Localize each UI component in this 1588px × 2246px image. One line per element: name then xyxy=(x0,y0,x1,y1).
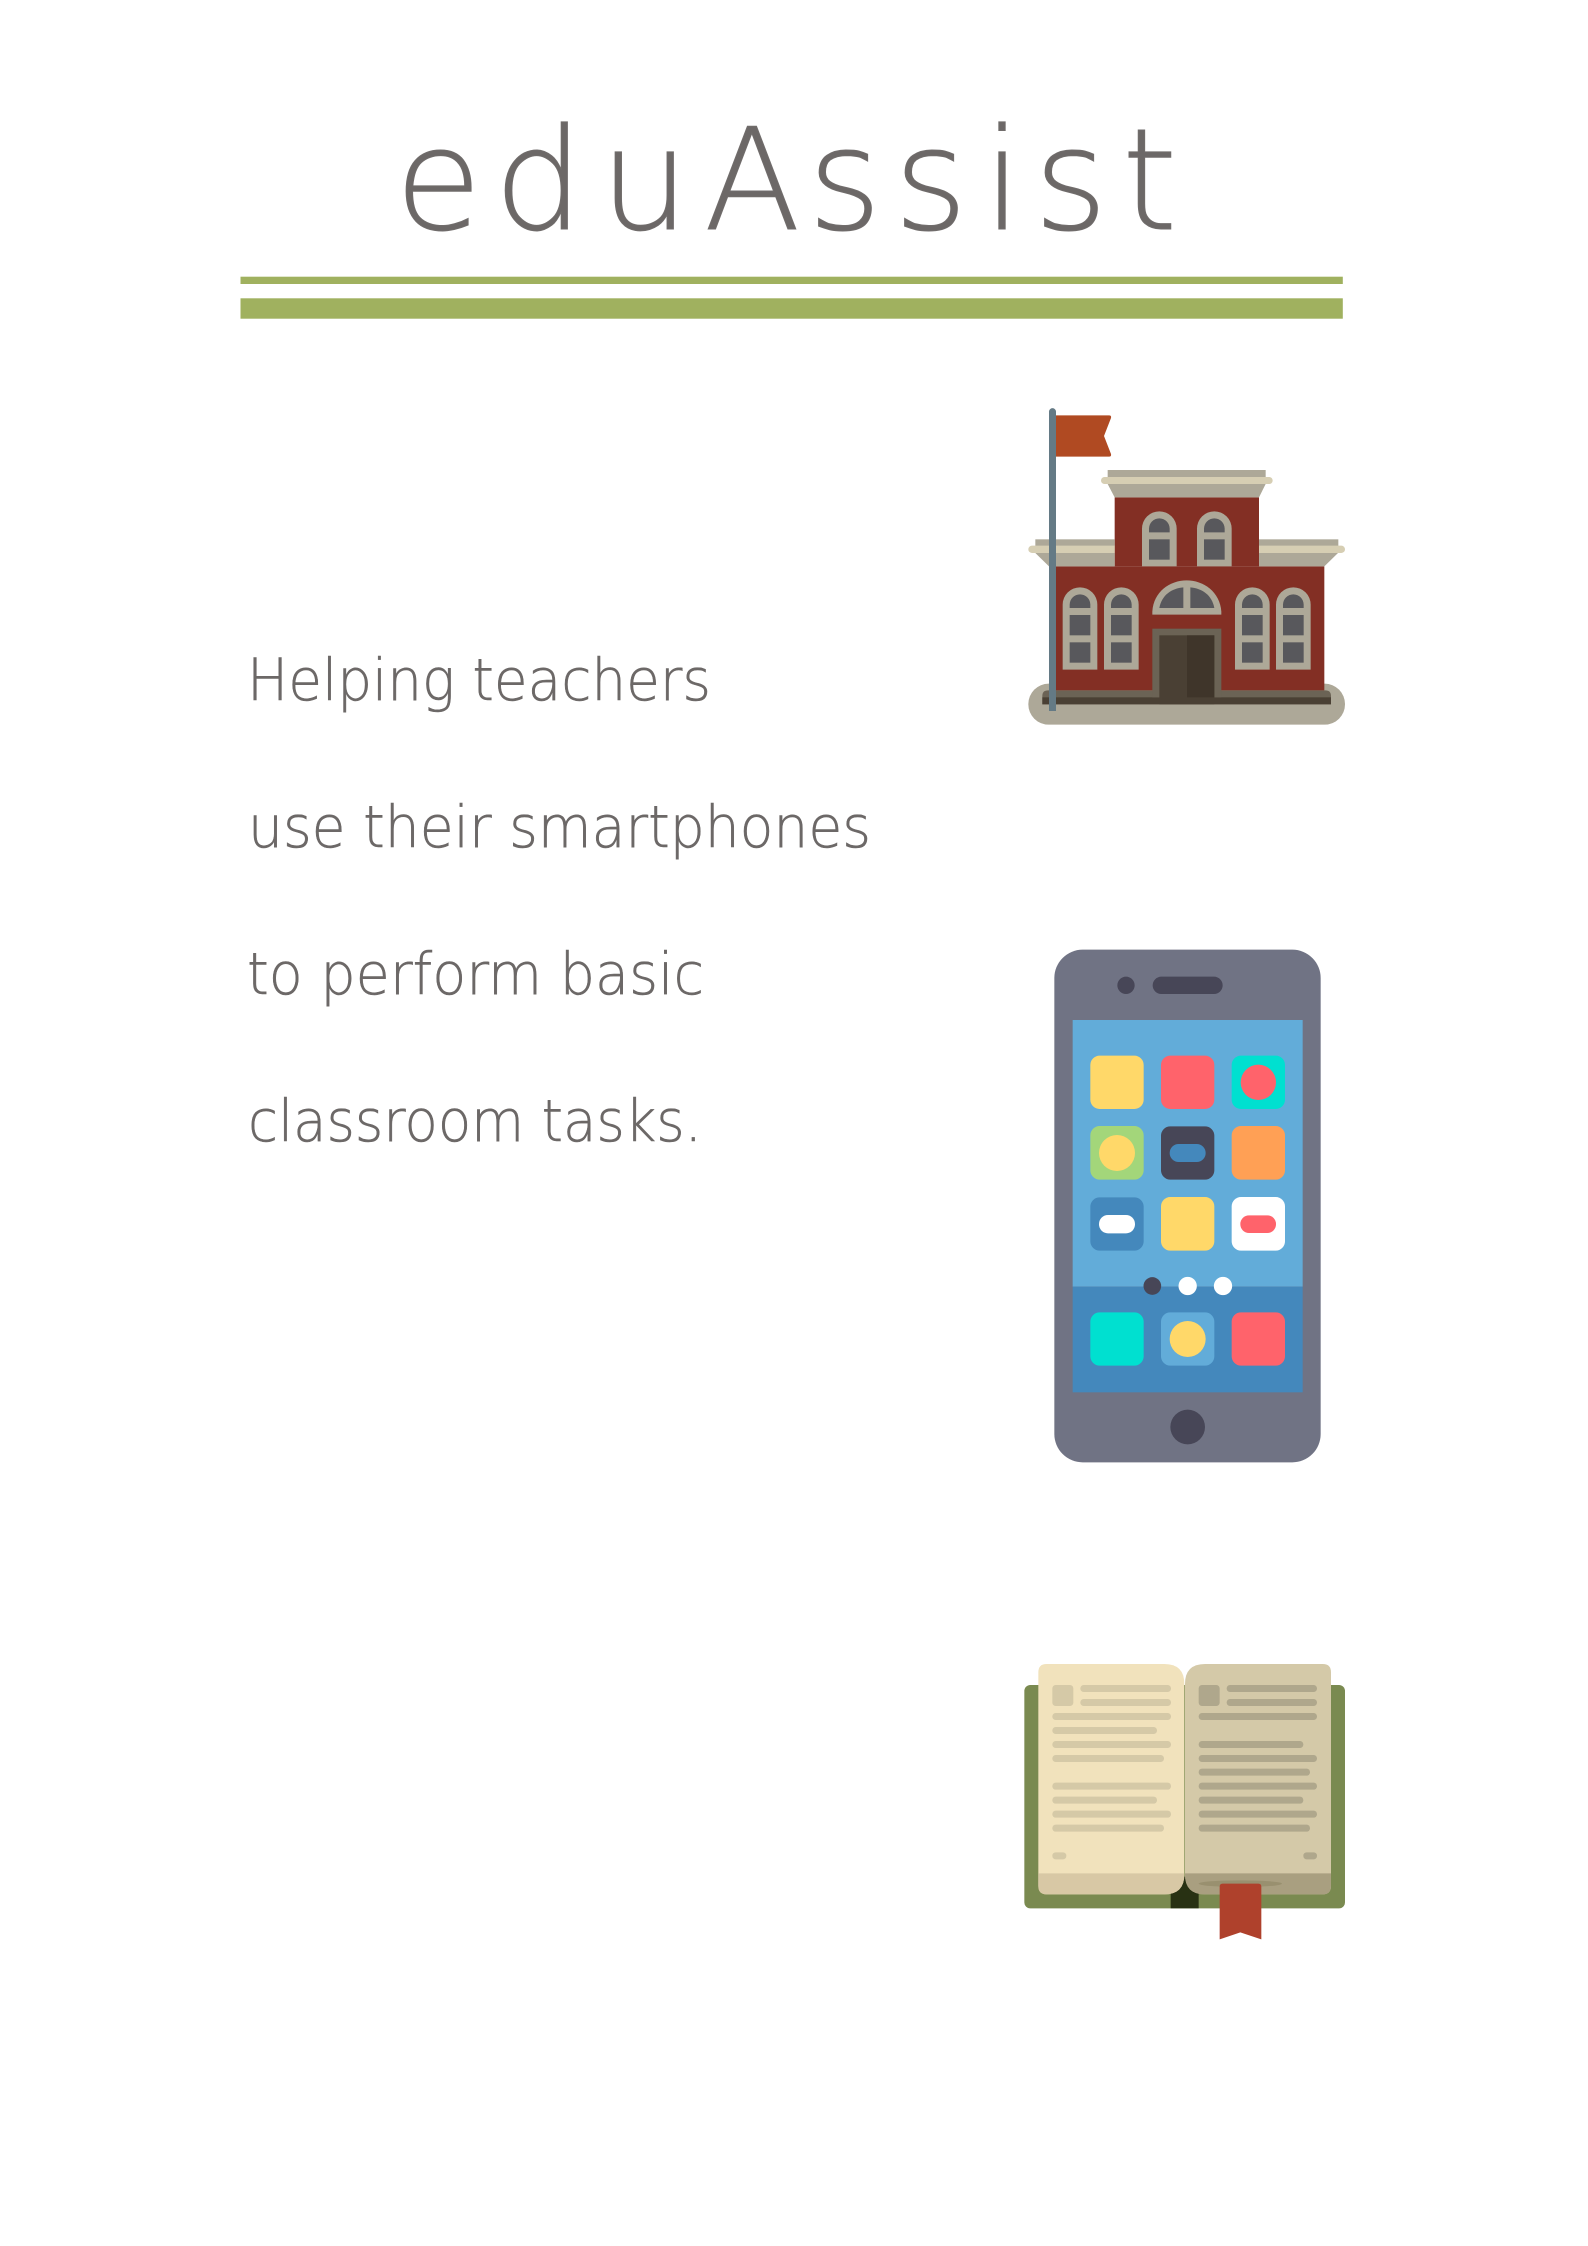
icon: school building xyxy=(1028,408,1345,725)
text block: mission statement: classroom tasks. xyxy=(248,1087,702,1155)
text block: mission statement: use their smartphones xyxy=(248,793,871,861)
text block: mission statement: to perform basic xyxy=(247,940,704,1008)
lower windows xyxy=(1063,587,1311,670)
upper windows xyxy=(1142,511,1232,566)
app grid xyxy=(1090,1056,1285,1251)
title underline: thick bar xyxy=(240,298,1343,319)
text block: mission statement: Helping teachers xyxy=(247,646,711,714)
arched centre window xyxy=(1152,580,1221,615)
page dots xyxy=(1143,1277,1232,1295)
flagpole xyxy=(1049,408,1056,711)
bookmark xyxy=(1220,1884,1261,1939)
title underline: thin bar xyxy=(240,277,1343,284)
dock apps xyxy=(1090,1312,1285,1366)
title: eduAssist xyxy=(395,99,1177,263)
flag xyxy=(1056,415,1111,457)
left page xyxy=(1038,1664,1184,1894)
right page xyxy=(1185,1664,1331,1894)
door xyxy=(1152,629,1221,704)
text block: mission statement xyxy=(247,646,871,1155)
home button xyxy=(1170,1410,1205,1444)
icon: smartphone xyxy=(1054,950,1321,1462)
icon: open book xyxy=(1024,1664,1345,1939)
